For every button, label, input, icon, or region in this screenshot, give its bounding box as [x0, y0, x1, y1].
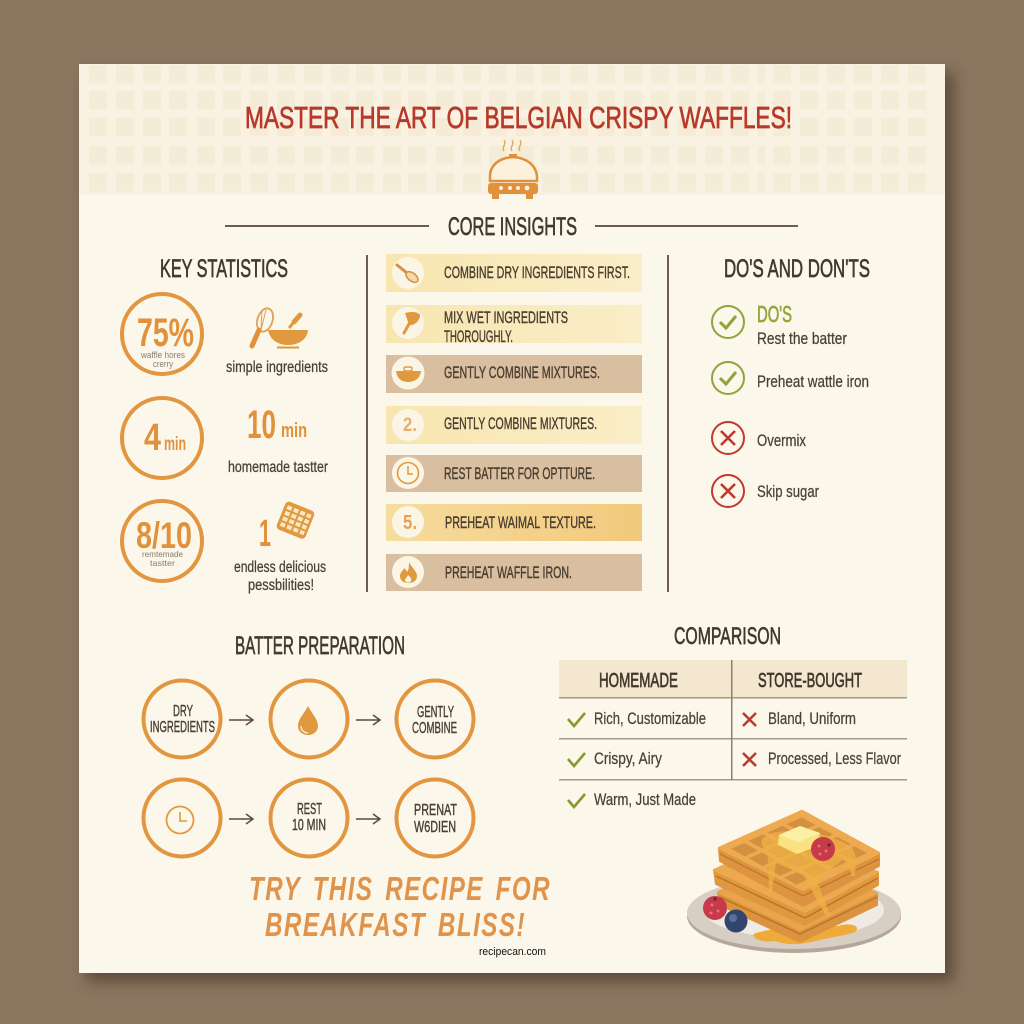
- syrup: [762, 831, 856, 916]
- don't: skip sugar: Skip sugar: [757, 482, 819, 501]
- flow node: clock: [144, 780, 220, 856]
- icon: whisk and bowl: [252, 306, 308, 348]
- step: preheat texture (5.): 5.: [403, 512, 417, 534]
- do: rest the batter: [712, 301, 847, 348]
- step: combine dry ingredients: COMBINE DRY INGREDIENTS FIRST.: [444, 263, 630, 282]
- row 1: [568, 709, 856, 728]
- stat: 75%: crerry: [153, 359, 173, 369]
- label: endless delicious possibilities: pessbilities!: [248, 577, 314, 594]
- step: mix wet ingredients: [386, 305, 642, 346]
- step: mix wet ingredients: MIX WET INGREDIENTS: [444, 308, 568, 327]
- panel: batter preparation: [144, 632, 474, 856]
- butter: [778, 826, 820, 854]
- step: preheat waffle iron: [386, 554, 642, 591]
- flow node: preheat: PRENAT: [414, 802, 457, 819]
- flow node: gently combine: [396, 680, 474, 758]
- stat: 4 min: min: [164, 434, 186, 455]
- flow node: rest 10 min: REST: [297, 801, 322, 818]
- row 1: Bland, Uniform: [768, 709, 856, 728]
- label: simple ingredients: simple ingredients: [226, 359, 328, 376]
- blueberry: [724, 910, 748, 932]
- stat: 1 with waffle iron icon: 1: [259, 513, 271, 555]
- flow node: dry ingredients: DRY: [173, 703, 193, 720]
- flow node: dry ingredients: [144, 680, 220, 758]
- step: gently combine mixtures (2.): 2.: [403, 415, 417, 436]
- step: mix wet ingredients: THOROUGHLY.: [444, 327, 513, 346]
- raspberry on plate: [703, 896, 727, 920]
- call to action: [249, 870, 551, 943]
- do: rest the batter: Rest the batter: [757, 329, 847, 348]
- call to action: TRY THIS RECIPE FOR: [249, 870, 551, 907]
- flow node: water drop: [270, 680, 348, 758]
- flow node: preheat: [396, 780, 474, 856]
- watermark: recipecan.com: [479, 946, 546, 958]
- stat: 8/10: [122, 501, 202, 581]
- stat: 75%: 75%: [137, 311, 194, 355]
- heading: core insights: CORE INSIGHTS: [448, 213, 577, 241]
- heading: comparison: COMPARISON: [674, 623, 781, 650]
- step: gently combine mixtures (2.): GENTLY COMBINE MIXTURES.: [444, 414, 597, 433]
- step: rest batter: [386, 455, 642, 492]
- heading: key statistics: KEY STATISTICS: [160, 255, 288, 283]
- arrow: [356, 814, 380, 824]
- table header: STORE-BOUGHT: [758, 670, 862, 692]
- step: preheat texture (5.): [386, 504, 642, 541]
- row 3: [568, 790, 696, 809]
- panel: do's and don'ts: [712, 255, 870, 507]
- row 2: Processed, Less Flavor: [768, 749, 901, 768]
- table header: [559, 660, 907, 697]
- stat: 4 min: [122, 398, 202, 478]
- don't: skip sugar: [712, 475, 819, 507]
- row 2: [568, 749, 901, 768]
- middle waffle: [714, 870, 878, 925]
- do: preheat waffle iron: Preheat wattle iron: [757, 372, 869, 391]
- label: endless delicious possibilities: endless delicious: [234, 559, 326, 576]
- step: rest batter: REST BATTER FOR OPTTURE.: [444, 464, 595, 483]
- flow node: rest 10 min: 10 MIN: [292, 817, 326, 834]
- panel: comparison: [559, 623, 907, 809]
- header band: waffle pattern: [79, 64, 945, 195]
- step: gently combine mixtures (2.): [386, 406, 642, 444]
- row 1: Rich, Customizable: [594, 709, 706, 728]
- top waffle: [719, 848, 879, 906]
- stat: 4 min: 4: [144, 417, 161, 459]
- flow node: rest 10 min: [270, 780, 348, 856]
- don't: overmix: Overmix: [757, 431, 806, 450]
- arrow: [229, 814, 253, 824]
- do: rest the batter: DO'S: [757, 301, 792, 327]
- card: [79, 64, 945, 973]
- raspberry on top: [811, 837, 835, 861]
- flow node: preheat: W6DIEN: [414, 819, 456, 836]
- label: homemade tastter: homemade tastter: [228, 459, 328, 476]
- row 3: Warm, Just Made: [594, 790, 696, 809]
- stat: 10 min: 10: [247, 403, 276, 447]
- stat: 75%: waffle hores: [140, 350, 185, 360]
- step: gently combine mixtures (bowl): GENTLY COMBINE MIXTURES.: [444, 363, 600, 382]
- step: combine dry ingredients: [386, 254, 642, 292]
- panel: key statistics: [122, 255, 328, 594]
- don't: overmix: [712, 422, 806, 454]
- call to action: BREAKFAST BLISS!: [265, 906, 526, 943]
- panel: steps list: [386, 254, 642, 591]
- bottom waffle: [718, 892, 877, 942]
- arrow: [229, 715, 253, 725]
- label: endless delicious possibilities: [234, 559, 326, 594]
- step: preheat texture (5.): PREHEAT WAIMAL TEXTURE.: [445, 513, 596, 532]
- step: preheat waffle iron: PREHEAT WAFFLE IRON.: [445, 563, 572, 582]
- stat: 75%: [122, 294, 202, 374]
- flow node: dry ingredients: INGREDIENTS: [150, 719, 215, 736]
- heading: batter preparation: BATTER PREPARATION: [235, 632, 405, 660]
- do: preheat waffle iron: [712, 362, 869, 394]
- illustration: waffle stack on plate: [687, 811, 901, 953]
- stat: 8/10: tastter: [150, 558, 175, 568]
- title: MASTER THE ART OF BELGIAN CRISPY WAFFLES!: [245, 100, 792, 135]
- row 2: Crispy, Airy: [594, 749, 662, 768]
- stat: 8/10: 8/10: [136, 515, 192, 556]
- table header: HOMEMADE: [599, 670, 678, 692]
- stat: 10 min: min: [281, 420, 307, 442]
- arrow: [356, 715, 380, 725]
- flow node: gently combine: GENTLY: [417, 704, 454, 721]
- heading: do's and don'ts: DO'S AND DON'TS: [724, 255, 870, 283]
- step: gently combine mixtures (bowl): [386, 355, 642, 393]
- stat: 8/10: remtemade: [142, 549, 183, 559]
- icon: waffle maker with steam: [488, 140, 538, 199]
- stat: 1 with waffle iron icon: [259, 500, 315, 555]
- flow node: gently combine: COMBINE: [412, 720, 457, 737]
